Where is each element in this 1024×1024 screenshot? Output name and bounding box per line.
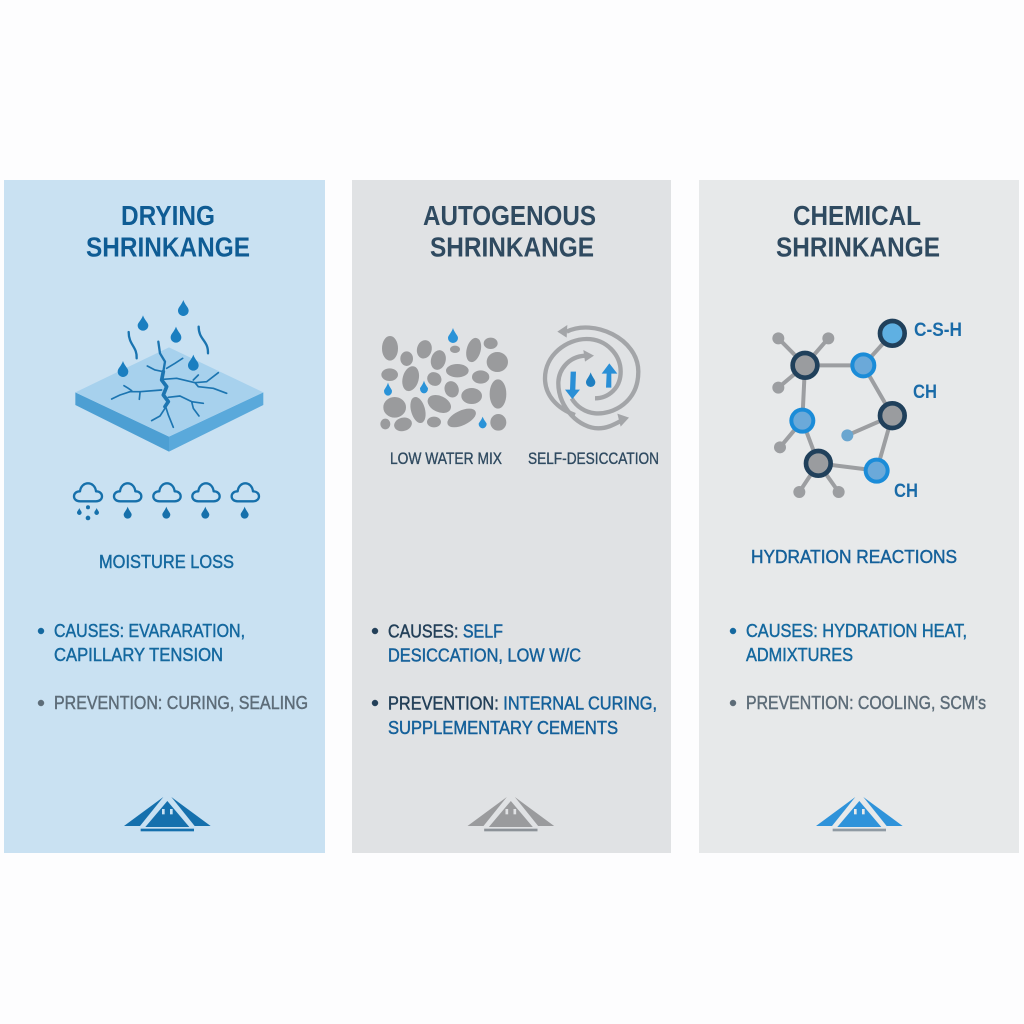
heading: drying shrinkage: SHRINKANGE — [86, 232, 250, 262]
bullet: causes — [38, 620, 245, 665]
heading: autogenous shrinkage: AUTOGENOUS — [423, 200, 596, 231]
label: moisture loss: MOISTURE LOSS — [99, 551, 234, 572]
icon: roof logo — [467, 797, 554, 831]
bullet: causes: DESICCATION, LOW W/C — [388, 644, 581, 666]
heading: drying shrinkage — [86, 200, 250, 262]
icon: roof logo — [124, 797, 211, 831]
bullet: causes: ADMIXTURES — [746, 644, 853, 665]
bullet: causes: CAUSES: HYDRATION HEAT, — [746, 620, 967, 641]
panel: chemical shrinkage — [699, 180, 1019, 853]
icon: roof logo — [816, 797, 903, 831]
heading: chemical shrinkage: SHRINKANGE — [776, 232, 940, 262]
icon: cracked slab with water drops — [75, 300, 263, 452]
bullet: causes: CAUSES: SELF — [388, 620, 503, 642]
panel: drying shrinkage — [4, 180, 325, 853]
bullet: causes: CAUSES: EVARARATION, — [54, 620, 245, 641]
bullet: causes: CAPILLARY TENSION — [54, 644, 223, 665]
bullet: prevention: PREVENTION: COOLING, SCM's — [746, 692, 986, 713]
label: C-S-H: C-S-H — [914, 320, 962, 341]
icon row: rain clouds — [74, 483, 259, 520]
heading: chemical shrinkage — [776, 200, 940, 262]
label: self-desiccation: SELF-DESICCATION — [528, 450, 659, 468]
panel: autogenous shrinkage — [352, 180, 671, 853]
label: CH lower: CH — [894, 481, 918, 502]
bullet: causes — [730, 620, 967, 665]
icon: self-desiccation cycle — [545, 325, 638, 428]
bullet: prevention: SUPPLEMENTARY CEMENTS — [388, 717, 618, 738]
bullet: causes — [372, 620, 581, 666]
label: low water mix: LOW WATER MIX — [390, 450, 502, 468]
label: hydration reactions: HYDRATION REACTIONS — [751, 546, 957, 567]
label: CH upper: CH — [913, 382, 937, 403]
icon: low water mix aggregate — [381, 328, 507, 432]
bullet: prevention: PREVENTION: CURING, SEALING — [54, 692, 308, 713]
heading: autogenous shrinkage: SHRINKANGE — [430, 232, 594, 262]
heading: autogenous shrinkage — [423, 200, 596, 262]
bullet: prevention — [372, 692, 657, 738]
bullet: prevention: PREVENTION: INTERNAL CURING, — [388, 692, 657, 714]
heading: drying shrinkage: DRYING — [121, 200, 215, 231]
heading: chemical shrinkage: CHEMICAL — [793, 200, 921, 231]
icon: molecule diagram — [772, 321, 905, 498]
